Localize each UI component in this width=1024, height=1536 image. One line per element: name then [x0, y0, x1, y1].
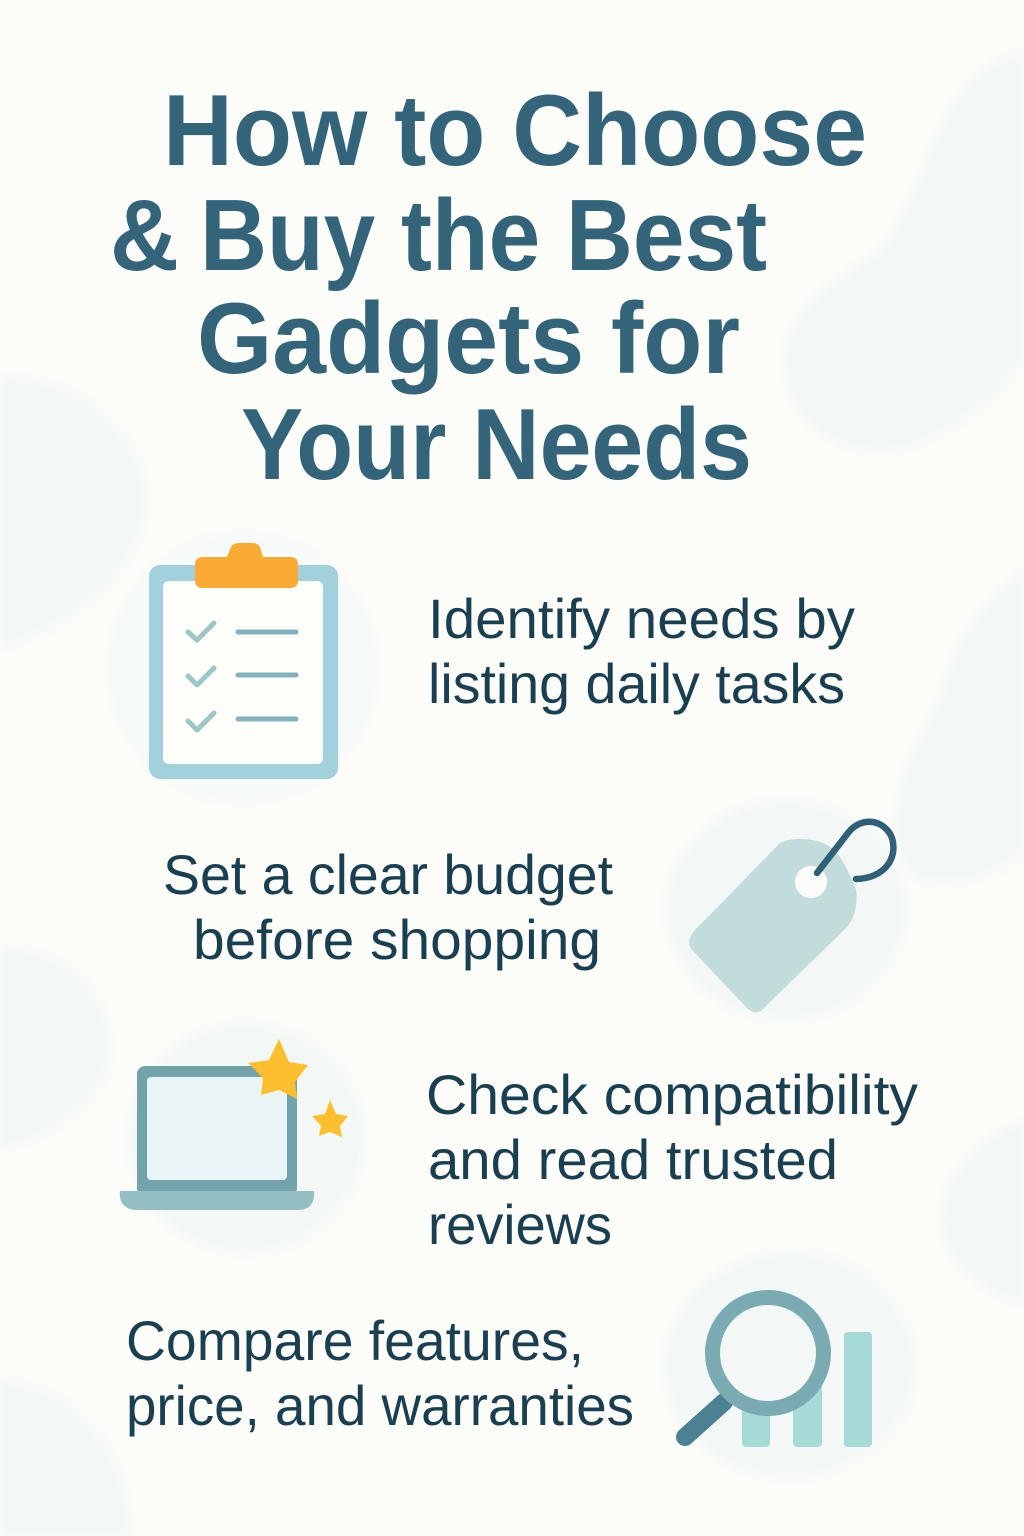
title — [110, 75, 867, 501]
step 3 text: and read trusted — [428, 1128, 838, 1191]
step 1 text: listing daily tasks — [428, 652, 845, 715]
title: Buy the Best — [200, 180, 767, 292]
step 2 icon: price tag — [666, 800, 906, 1020]
icon: small star — [312, 1100, 348, 1137]
title: Your Needs — [241, 389, 752, 501]
icon: large star — [248, 1039, 308, 1099]
step 1 icon: clipboard checklist — [108, 533, 378, 803]
step 4 text: Compare features, — [126, 1309, 584, 1372]
title: & — [110, 180, 179, 292]
step 2 text: Set a clear budget — [163, 843, 613, 906]
step 4 icon: magnifier over bar chart — [664, 1252, 916, 1478]
step 1 text: Identify needs by — [428, 587, 855, 650]
step 3 icon: laptop with stars — [120, 1023, 364, 1253]
step 1 text — [428, 587, 855, 715]
step 3 text — [426, 1063, 918, 1256]
title: How to Choose — [163, 75, 867, 187]
step 2 text — [163, 843, 613, 971]
step 3 text: reviews — [428, 1193, 612, 1256]
step 4 text — [126, 1309, 634, 1437]
title: Gadgets for — [197, 283, 740, 395]
step 4 text: price, and warranties — [126, 1374, 634, 1437]
step 2 text: before shopping — [193, 908, 601, 971]
step 3 text: Check compatibility — [426, 1063, 918, 1126]
